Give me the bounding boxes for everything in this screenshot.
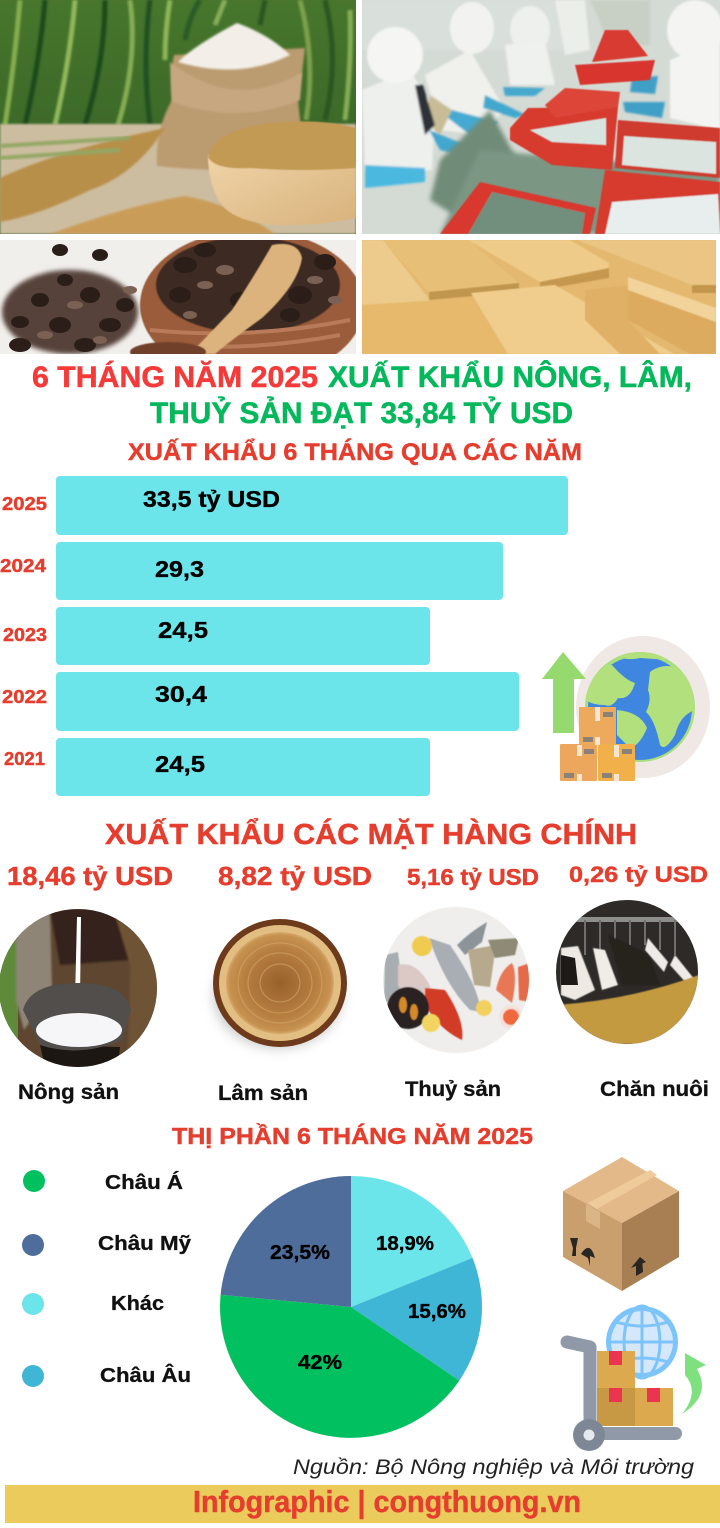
legend: Châu Mỹ: Châu Mỹ [98, 1233, 192, 1255]
title: 6 THÁNG NĂM 2025 [32, 360, 318, 394]
bar 2025 [2, 476, 568, 535]
bar 2025: 33,5 tỷ USD [143, 486, 280, 512]
bar 2021: 24,5 [155, 751, 205, 777]
bowl [208, 155, 356, 225]
pie chart: market share: 23,5% [270, 1242, 330, 1264]
bar 2024: 2024 [0, 556, 46, 576]
title [32, 360, 692, 430]
photo: rice sack and bowl [0, 0, 356, 234]
photo: timber planks [362, 240, 716, 354]
source note: Nguồn: Bộ Nông nghiệp và Môi trường [293, 1456, 694, 1479]
photo: coffee beans and spoon [0, 240, 356, 354]
spoon [190, 244, 302, 354]
bar 2021: 2021 [4, 749, 45, 769]
arrow [542, 652, 586, 733]
photo: tree trunk slice [213, 919, 347, 1048]
commodity: forestry products: 8,82 tỷ USD [218, 861, 372, 891]
grain pile [50, 196, 275, 234]
commodity: fishery products [383, 864, 539, 1101]
footer band: Infographic | congthuong.vn [193, 1484, 581, 1519]
legend [22, 1170, 192, 1387]
title: THUỶ SẢN ĐẠT 33,84 TỶ USD [150, 396, 573, 430]
icon: trolley with boxes, globe and arrow [567, 1306, 706, 1451]
heading: main export commodities: XUẤT KHẨU CÁC MẶT HÀNG CHÍNH [105, 817, 637, 851]
pie chart: market share: 15,6% [408, 1301, 466, 1323]
bar 2022 [2, 672, 519, 731]
label: Chăn nuôi [600, 1078, 709, 1101]
bar 2023: 2023 [3, 625, 47, 645]
commodity: livestock products: 0,26 tỷ USD [569, 862, 708, 887]
legend: Châu Á [23, 1170, 183, 1194]
bar 2024: 29,3 [155, 556, 204, 582]
rice stalks [0, 128, 165, 222]
pie chart: market share: 42% [298, 1352, 342, 1374]
label: Thuỷ sản [405, 1078, 501, 1101]
photo: dairy cows feeding [556, 900, 699, 1044]
legend: Khác [22, 1293, 164, 1315]
legend: Châu Á: Châu Á [105, 1171, 183, 1194]
title: XUẤT KHẨU NÔNG, LÂM, [328, 360, 692, 394]
bar 2022: 2022 [2, 687, 47, 707]
bar chart: 6-month exports by year [0, 476, 568, 796]
photo: rubber latex cup [0, 909, 158, 1067]
pie chart: market share [220, 1176, 482, 1438]
rice sack [157, 48, 305, 170]
label: Lâm sản [218, 1082, 308, 1105]
footer band [5, 1484, 720, 1523]
commodity: agricultural products: 18,46 tỷ USD [7, 861, 173, 891]
pie chart: market share: 18,9% [376, 1233, 434, 1255]
label: Nông sản [18, 1081, 119, 1104]
legend: Châu Mỹ [22, 1233, 192, 1256]
icon: cardboard box [563, 1157, 679, 1291]
legend: Châu Âu [22, 1363, 191, 1387]
commodity: forestry products [213, 861, 372, 1105]
bar 2023: 24,5 [158, 617, 208, 643]
bar 2021 [4, 738, 430, 796]
bar 2023 [3, 607, 430, 665]
legend: Khác: Khác [111, 1293, 164, 1315]
commodity: agricultural products [0, 861, 173, 1104]
bar 2024 [0, 542, 503, 600]
heading: exports by year: XUẤT KHẨU 6 THÁNG QUA CÁC NĂM [128, 438, 582, 466]
photo collage [0, 0, 720, 380]
bar 2022: 30,4 [155, 681, 207, 707]
bar 2025: 2025 [2, 494, 47, 514]
commodity: livestock products [556, 862, 709, 1101]
legend: Châu Âu: Châu Âu [100, 1363, 191, 1387]
icon: globe with arrow and boxes [542, 636, 710, 781]
commodity: fishery products: 5,16 tỷ USD [407, 864, 539, 890]
boxes [579, 707, 616, 745]
heading: market share: THỊ PHẦN 6 THÁNG NĂM 2025 [172, 1122, 533, 1149]
photo: seafood platter [383, 907, 530, 1054]
photo: seafood processing line [362, 0, 720, 234]
